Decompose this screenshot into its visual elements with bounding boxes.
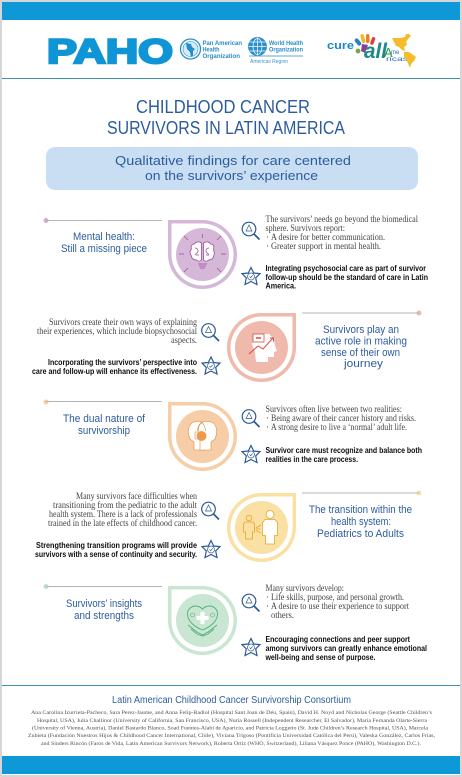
icon: search bbox=[242, 222, 260, 240]
logo: PAHO: PAHO bbox=[47, 33, 173, 71]
findings text: · bbox=[266, 422, 269, 432]
findings text: A desire to use their experience to support bbox=[271, 601, 409, 611]
text: Pan American Health Organization bbox=[202, 40, 242, 60]
heading: insights: and strengths bbox=[74, 610, 134, 622]
findings text bbox=[266, 583, 409, 620]
heading: transition: health system: bbox=[331, 516, 391, 528]
findings text bbox=[37, 317, 197, 345]
panel: active role bbox=[32, 310, 422, 382]
recommendation text: Encouraging connections and peer support bbox=[266, 635, 410, 644]
findings text: Many survivors face difficulties when bbox=[76, 491, 197, 501]
heading: active role: journey bbox=[343, 358, 384, 370]
heading: active role: sense of their own bbox=[321, 347, 400, 359]
findings text: Survivors often live between two realities: bbox=[266, 404, 402, 414]
findings text: A strong desire to live a ‘normal’ adult life. bbox=[271, 422, 407, 432]
heading: insights: Survivors’ insights bbox=[66, 598, 142, 610]
recommendation text: America. bbox=[266, 282, 296, 290]
findings text bbox=[266, 214, 418, 251]
recommendation text bbox=[35, 541, 197, 559]
heading: dual nature: survivorship bbox=[78, 425, 130, 437]
icon: star bbox=[242, 638, 260, 656]
heading: transition: Pediatrics to Adults bbox=[317, 528, 404, 540]
text: Pan American Health Organization: Health bbox=[202, 46, 220, 54]
findings text: health system. There is a lack of professionals bbox=[49, 509, 197, 519]
heading: transition bbox=[302, 490, 422, 540]
top banner bbox=[2, 2, 460, 20]
icon: search bbox=[242, 594, 260, 612]
heading: mental health bbox=[44, 218, 162, 255]
heading: insights bbox=[44, 584, 162, 622]
consortium credits: Ana Carolina Izurrieta-Pacheco, Sara Perez-Jaume, and Anna Felip-Badiol (Hospital Sant Joan de Déu, Spain), David H. Noyd and Nicholas George (Seattle Children’s bbox=[31, 709, 432, 716]
findings text: aspects. bbox=[171, 335, 197, 345]
heading: active role: Survivors play an bbox=[323, 324, 399, 336]
recommendation text: well-being and sense of purpose. bbox=[265, 653, 376, 662]
consortium credits bbox=[28, 695, 436, 747]
logo: cure all Americas bbox=[327, 34, 416, 68]
findings text: their experiences, which include biopsychosocial bbox=[37, 326, 197, 336]
heading: transition: The transition within the bbox=[309, 504, 412, 516]
icon: search bbox=[242, 410, 260, 427]
findings text: · bbox=[266, 232, 269, 242]
consortium credits: (University of Vienna, Austria), Daniel Bastardo Blanco, Soad Fuentes-Alabí de Aparicio, and Patricia Loggetto (St. Jude Children’s Research Hospital, USA), Marcela bbox=[32, 724, 429, 732]
findings text: The survivors’ needs go beyond the biomedical bbox=[266, 214, 418, 224]
findings text: transitioning from the pediatric to the adult bbox=[53, 500, 197, 510]
recommendation text: Strengthening transition programs will provide bbox=[36, 541, 197, 550]
recommendation text: follow-up should be the standard of care in Latin bbox=[266, 273, 428, 282]
text: Pan American Health Organization: Organization bbox=[202, 53, 240, 60]
title bbox=[107, 97, 345, 138]
findings text: · bbox=[266, 592, 269, 602]
icon: brain in drop bbox=[168, 220, 237, 289]
heading: dual nature: The dual nature of bbox=[63, 413, 146, 425]
findings text bbox=[48, 491, 197, 528]
title: SURVIVORS IN LATIN AMERICA bbox=[107, 118, 345, 138]
icon: search bbox=[202, 324, 219, 341]
heading: active role bbox=[302, 310, 422, 370]
recommendation text: care and follow-up will enhance its effectiveness. bbox=[32, 367, 197, 376]
findings text: sphere. Survivors report: bbox=[266, 223, 345, 233]
findings text: Life skills, purpose, and personal growth. bbox=[271, 592, 404, 602]
logos header bbox=[47, 33, 416, 71]
icon: heart and hands in drop bbox=[168, 586, 237, 655]
findings text: Being aware of their cancer history and risks. bbox=[271, 413, 416, 423]
findings text: A desire for better communication. bbox=[271, 232, 385, 242]
findings text: Many survivors develop: bbox=[266, 583, 344, 593]
title: CHILDHOOD CANCER bbox=[136, 97, 310, 117]
heading: mental health: Mental health: bbox=[73, 231, 135, 243]
logo: cure all Americas: all bbox=[364, 40, 388, 63]
recommendation text: among survivors can greatly enhance emotional bbox=[266, 644, 427, 653]
findings text: · bbox=[266, 241, 269, 251]
icon: search bbox=[202, 502, 219, 520]
panel: dual nature bbox=[44, 400, 422, 471]
recommendation text bbox=[265, 635, 427, 662]
recommendation text: Integrating psychosocial care as part of survivor bbox=[266, 264, 427, 273]
recommendation text bbox=[266, 446, 422, 464]
subtitle pill bbox=[46, 147, 418, 190]
findings text: trained in the late effects of childhood cancer. bbox=[48, 518, 197, 528]
logo: cure all Americas: cure bbox=[327, 40, 354, 52]
findings text: others. bbox=[271, 610, 294, 620]
text: World Health Organization bbox=[269, 40, 303, 54]
findings text: · bbox=[266, 601, 269, 611]
recommendation text bbox=[266, 264, 428, 290]
findings text bbox=[266, 404, 416, 432]
recommendation text: Survivor care must recognize and balance both bbox=[266, 446, 422, 455]
panel: insights and strengths bbox=[44, 583, 427, 662]
subtitle pill: on the survivors’ experience bbox=[145, 168, 318, 183]
recommendation text bbox=[32, 358, 197, 376]
findings text: · bbox=[266, 413, 269, 423]
consortium credits: and Sinders Rincón (Faros de Vida, Latin American Survivors Network), Roberta Ortiz (WHO, Switzerland), Liliana Vásquez Ponce (PAHO), Washington D.C.). bbox=[41, 740, 422, 747]
consortium credits: Hospital, USA), Julia Challinor (University of California, San Francisco, USA), Nuria Rossell (Independent Researcher, El Salvador), María Fernanda Olarte-Sierra bbox=[37, 717, 428, 724]
findings text: Greater support in mental health. bbox=[271, 241, 381, 251]
icon: star bbox=[242, 268, 260, 284]
findings text: Survivors create their own ways of explaining bbox=[49, 317, 197, 327]
recommendation text: realities in the care process. bbox=[266, 455, 358, 464]
icon: star bbox=[202, 357, 220, 374]
icon: star bbox=[202, 540, 220, 558]
panel: mental health bbox=[44, 214, 428, 290]
icon: two heads in drop bbox=[168, 402, 237, 471]
recommendation text: survivors with a sense of continuity and security. bbox=[35, 550, 197, 559]
icon: PAHO emblem bbox=[180, 39, 200, 59]
icon: head with chart in drop bbox=[227, 313, 296, 382]
logo: cure all Americas: me bbox=[391, 50, 400, 56]
icon: WHO emblem bbox=[248, 37, 267, 56]
text: Pan American Health Organization: Pan American bbox=[202, 40, 242, 47]
subtitle pill: Qualitative findings for care centered bbox=[115, 153, 351, 168]
panel: transition bbox=[35, 490, 422, 562]
consortium credits: Zubieta (Fundación Nuestros Hijos & Childhood Cancer International, Chile), Viviana Trigoso (Pontificia Universidad Católica del Perú), Valeska González, Carlos Frías, bbox=[28, 732, 436, 739]
heading: dual nature bbox=[44, 400, 162, 437]
icon: child and adult in drop bbox=[227, 493, 296, 562]
bottom banner bbox=[2, 756, 460, 774]
recommendation text: Incorporating the survivors’ perspective into bbox=[48, 358, 197, 367]
logo: cure all Americas: A bbox=[384, 45, 393, 60]
heading: mental health: Still a missing piece bbox=[61, 243, 147, 255]
consortium credits: Latin American Childhood Cancer Survivorship Consortium bbox=[112, 695, 351, 706]
text: World Health Organization: Organization bbox=[269, 46, 303, 54]
logo: cure all Americas: ricas bbox=[386, 57, 408, 63]
logos header: Americas Region bbox=[250, 59, 288, 65]
text: World Health Organization: World Health bbox=[269, 40, 303, 47]
heading: active role: active role in making bbox=[315, 336, 407, 348]
icon: star bbox=[242, 446, 260, 462]
